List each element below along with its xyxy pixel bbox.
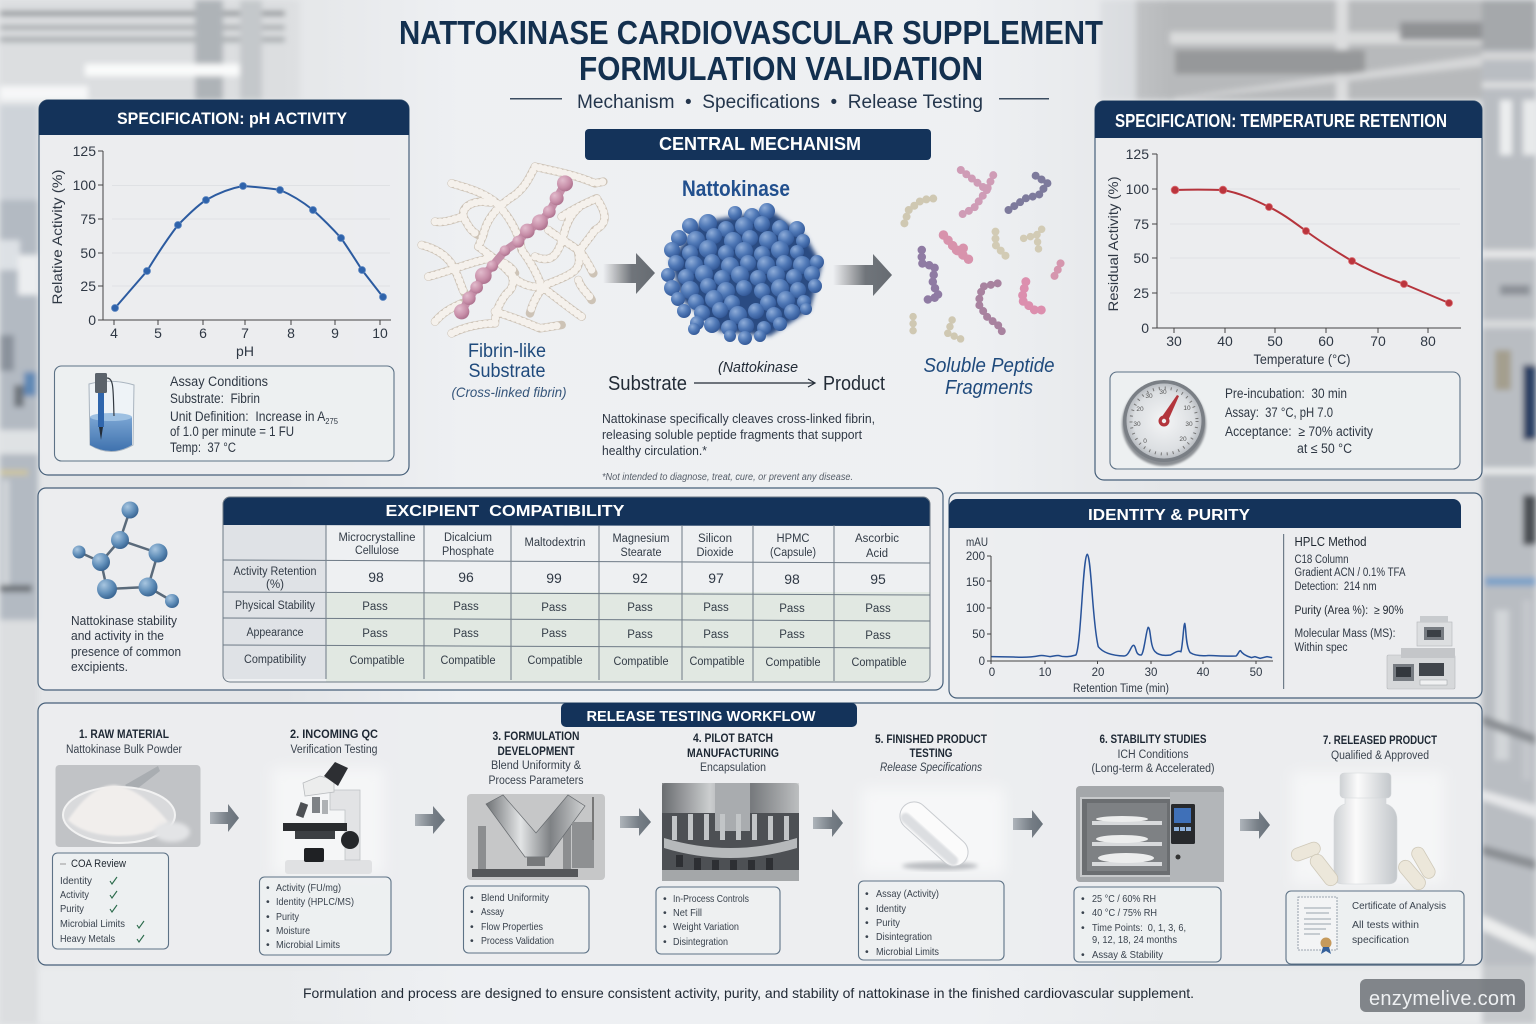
table: excipient compatibility: 92 xyxy=(632,570,648,586)
heading: central mechanism: CENTRAL MECHANISM xyxy=(659,134,861,154)
table: excipient compatibility: Magnesium xyxy=(612,533,670,545)
panel: temperature retention xyxy=(1095,101,1482,480)
text: assay conditions: Temp: 37 °C xyxy=(170,440,236,455)
box: COA review: Microbial Limits xyxy=(60,918,125,930)
box: ICH conditions xyxy=(1074,887,1221,962)
table: excipient compatibility: Pass xyxy=(627,602,653,614)
step 5: finished product testing: 5. FINISHED PRODUCT xyxy=(875,732,988,746)
table: excipient compatibility: 95 xyxy=(870,571,886,587)
table: excipient compatibility: Silicon xyxy=(698,533,732,545)
label: fibrin-like substrate: (Cross-linked fibrin) xyxy=(452,384,566,400)
arrow 2 xyxy=(415,806,445,834)
text: HPLC method: Within spec xyxy=(1294,642,1348,654)
title: NATTOKINASE CARDIOVASCULAR SUPPLEMENT xyxy=(399,14,1103,51)
table: excipient compatibility: Phosphate xyxy=(442,546,494,558)
text: HPLC method: HPLC Method xyxy=(1294,534,1366,549)
table: excipient compatibility: Pass xyxy=(362,628,388,640)
chromatogram: 10 xyxy=(1039,667,1051,679)
text: pre-incubation conditions: Pre-incubation: 30 min xyxy=(1225,386,1347,401)
table: excipient compatibility: Compatible xyxy=(350,655,404,667)
table: excipient compatibility: Pass xyxy=(541,602,567,614)
box: in-process tests: • xyxy=(663,936,667,948)
text: assay conditions: Substrate: Fibrin xyxy=(170,391,260,406)
box: incoming QC tests: Moisture xyxy=(276,925,310,937)
icon: temperature gauge: 30 xyxy=(1133,421,1141,428)
image: V blender xyxy=(467,794,605,880)
box: assay conditions xyxy=(54,366,394,461)
table: excipient compatibility: 98 xyxy=(784,571,800,587)
box: incoming QC tests: Activity (FU/mg) xyxy=(276,882,341,894)
table: excipient compatibility: Pass xyxy=(627,629,653,641)
image: bottle with capsules xyxy=(1290,772,1444,893)
label: soluble peptide fragments: Soluble Peptide xyxy=(924,355,1054,377)
box: incoming QC tests: Microbial Limits xyxy=(276,939,340,951)
line chart: pH activity: 7 xyxy=(241,325,249,341)
table: excipient compatibility: Physical Stability xyxy=(235,600,315,612)
reaction equation: Product xyxy=(823,373,885,395)
icon: temperature gauge: 30 xyxy=(1145,393,1153,400)
step 3: formulation development: Process Parameters xyxy=(488,775,584,787)
chromatogram: 150 xyxy=(966,577,985,589)
box: COA review xyxy=(52,853,168,949)
chromatogram: 0 xyxy=(979,656,985,668)
table: excipient compatibility: 99 xyxy=(546,570,562,586)
box: release tests xyxy=(858,881,1004,960)
label: fibrin-like substrate: Substrate xyxy=(468,361,546,382)
text: pre-incubation conditions: Acceptance: ≥ 70% activity xyxy=(1225,424,1373,439)
panel heading: identity and purity: IDENTITY & PURITY xyxy=(1088,507,1250,524)
text: assay conditions: 275 xyxy=(325,416,338,426)
table: excipient compatibility: HPMC xyxy=(776,533,810,545)
text: mechanism description: releasing soluble peptide fragments that support xyxy=(602,427,862,442)
table: excipient compatibility: Compatible xyxy=(440,655,496,667)
box: in-process tests: • xyxy=(663,921,667,933)
step 2: incoming QC: Verification Testing xyxy=(290,744,378,756)
text: assay conditions xyxy=(170,374,338,455)
text: excipient note: Nattokinase stability xyxy=(71,614,178,628)
icon: temperature gauge xyxy=(1122,380,1206,466)
line chart: pH activity: 25 xyxy=(80,278,96,294)
box: in-process tests xyxy=(656,887,780,954)
step 5: finished product testing: Release Specifications xyxy=(880,762,982,774)
icon: temperature gauge: 30 xyxy=(1185,421,1193,428)
image: capsule xyxy=(862,788,1004,874)
box: release tests: • xyxy=(865,888,869,900)
text: HPLC method: Gradient ACN / 0.1% TFA xyxy=(1294,567,1406,579)
panel heading: release testing workflow: RELEASE TESTING WORKFLOW xyxy=(586,708,816,725)
box: incoming QC tests: • xyxy=(266,882,270,894)
panel: release testing workflow xyxy=(38,703,1482,965)
step 1: raw material: Nattokinase Bulk Powder xyxy=(66,744,182,756)
chromatogram xyxy=(966,537,1273,695)
table: excipient compatibility: Cellulose xyxy=(355,545,399,557)
chromatogram: 40 xyxy=(1197,667,1209,679)
text: mechanism description: healthy circulation.* xyxy=(602,443,707,458)
arrow 6 xyxy=(1240,811,1270,839)
box: incoming QC tests: • xyxy=(266,925,270,937)
box: in-process tests: In-Process Controls xyxy=(673,893,749,905)
chromatogram: mAU xyxy=(966,537,988,549)
table: excipient compatibility: Pass xyxy=(703,602,729,614)
table: excipient compatibility: Microcrystalline xyxy=(338,532,416,544)
panel heading: temperature retention: SPECIFICATION: TEMPERATURE RETENTION xyxy=(1115,111,1447,131)
box: formulation tests: Blend Uniformity xyxy=(481,892,550,904)
table: excipient compatibility: Compatible xyxy=(690,656,744,668)
icon: temperature gauge: 0 xyxy=(1143,438,1147,445)
box: ICH conditions: Time Points: 0, 1, 3, 6, xyxy=(1092,922,1186,934)
table: excipient compatibility: Compatible xyxy=(528,655,582,667)
table: excipient compatibility xyxy=(223,497,930,682)
footer statement: Formulation and process are designed to ensure consistent activity, purity, and stability of nattokinase in the finished cardiovascular supplement. xyxy=(303,985,1194,1001)
chromatogram: Retention Time (min) xyxy=(1073,683,1169,695)
line chart: temperature retention: 40 xyxy=(1217,333,1233,349)
box: incoming QC tests: • xyxy=(266,896,270,908)
text: excipient note xyxy=(71,614,181,674)
chromatogram: 50 xyxy=(1250,667,1262,679)
chromatogram: 100 xyxy=(966,603,985,615)
label: soluble peptide fragments xyxy=(924,355,1054,399)
step 3: formulation development: Blend Uniformity & xyxy=(491,760,581,772)
line chart: temperature retention: 30 xyxy=(1166,333,1182,349)
table: excipient compatibility: Activity Retention xyxy=(234,566,316,578)
table: excipient compatibility: Compatible xyxy=(766,657,820,669)
table: excipient compatibility: Dicalcium xyxy=(444,532,492,544)
panel heading: pH activity: SPECIFICATION: pH ACTIVITY xyxy=(117,109,348,128)
line chart: pH activity: 50 xyxy=(80,245,96,261)
step 1: raw material xyxy=(52,727,200,949)
line chart: temperature retention: 75 xyxy=(1133,216,1149,232)
line chart: pH activity: Relative Activity (%) xyxy=(49,170,65,304)
box: COA review: Purity xyxy=(60,903,85,915)
text: assay conditions: Unit Definition: Increase in A xyxy=(170,409,343,424)
text: pre-incubation conditions: at ≤ 50 °C xyxy=(1297,441,1352,456)
text: HPLC method: Detection: 214 nm xyxy=(1294,581,1376,593)
step 4: pilot batch manufacturing: MANUFACTURING xyxy=(687,746,779,760)
box: incoming QC tests: Purity xyxy=(276,911,300,923)
line chart: pH activity: 75 xyxy=(80,211,96,227)
arrow: substrate to enzyme xyxy=(603,253,655,294)
panel heading: identity and purity xyxy=(949,499,1461,528)
line chart: temperature retention: Residual Activity (%) xyxy=(1105,176,1121,312)
title xyxy=(399,14,1103,87)
box: release tests: • xyxy=(865,917,869,929)
table: excipient compatibility: Acid xyxy=(866,548,888,560)
step 3: formulation development: 3. FORMULATION xyxy=(492,729,580,743)
box: certificate of analysis: specification xyxy=(1352,934,1409,946)
arrow 3 xyxy=(620,808,651,836)
line chart: temperature retention: 50 xyxy=(1267,333,1283,349)
text: mechanism description: Nattokinase specifically cleaves cross-linked fibrin, xyxy=(602,411,875,426)
line chart: pH activity: 8 xyxy=(287,325,295,341)
line chart: pH activity: 125 xyxy=(73,143,96,159)
line chart: temperature retention: 125 xyxy=(1126,146,1149,162)
box: ICH conditions: 40 °C / 75% RH xyxy=(1092,907,1157,919)
box: release tests: Identity xyxy=(876,903,907,915)
table: excipient compatibility: Pass xyxy=(453,628,479,640)
chromatogram: 50 xyxy=(972,629,985,641)
reaction equation: Substrate xyxy=(608,373,687,395)
illustration: fibrin-like substrate network xyxy=(422,167,605,333)
icon: beaker with pH probe xyxy=(89,373,134,452)
line chart: temperature retention: 80 xyxy=(1420,333,1436,349)
label: fibrin-like substrate xyxy=(452,341,566,400)
step 6: stability studies: ICH Conditions xyxy=(1118,749,1189,761)
line chart: temperature retention: 70 xyxy=(1370,333,1386,349)
box: COA review: Heavy Metals xyxy=(60,933,115,945)
line chart: pH activity: 0 xyxy=(88,312,96,328)
box: in-process tests: • xyxy=(663,893,667,905)
step 2: incoming QC: 2. INCOMING QC xyxy=(290,727,378,741)
box: in-process tests: Net Fill xyxy=(673,907,702,919)
step 6: stability studies xyxy=(1074,732,1224,962)
line chart: temperature retention: 100 xyxy=(1126,181,1149,197)
heading: central mechanism xyxy=(585,129,931,160)
table: excipient compatibility: Stearate xyxy=(620,547,662,559)
text: HPLC method xyxy=(1294,534,1406,654)
table: excipient compatibility: Compatible xyxy=(852,657,906,669)
box: incoming QC tests xyxy=(260,877,391,955)
icon: temperature gauge: 20 xyxy=(1136,406,1144,413)
box: formulation tests: • xyxy=(470,921,474,933)
step 2: incoming QC xyxy=(260,727,391,955)
label: nattokinase: Nattokinase xyxy=(682,176,790,201)
panel heading: temperature retention xyxy=(1095,101,1482,138)
arrow 5 xyxy=(1013,810,1043,838)
box: COA review: COA Review xyxy=(71,858,126,870)
step 1: raw material: 1. RAW MATERIAL xyxy=(79,727,169,741)
line chart: temperature retention: 0 xyxy=(1141,320,1149,336)
text: excipient note: presence of common xyxy=(71,645,181,659)
icon: HPLC instrument xyxy=(1387,616,1455,689)
table: excipient compatibility: Pass xyxy=(453,601,479,613)
panel: excipient compatibility xyxy=(38,488,943,690)
table: excipient compatibility: Appearance xyxy=(246,627,304,639)
box: formulation tests: Flow Properties xyxy=(481,921,543,933)
line chart: temperature retention: 50 xyxy=(1133,250,1149,266)
illustration: soluble peptide fragments xyxy=(904,170,1061,340)
table: excipient compatibility: Pass xyxy=(779,629,805,641)
box: formulation tests xyxy=(464,886,589,953)
step 7: released product xyxy=(1286,733,1464,964)
text: HPLC method: C18 Column xyxy=(1294,554,1348,566)
label: fibrin-like substrate: Fibrin-like xyxy=(468,341,546,362)
box: formulation tests: Process Validation xyxy=(481,935,554,947)
chromatogram: 20 xyxy=(1092,667,1104,679)
watermark: enzymelive.com xyxy=(1369,988,1516,1010)
line chart: pH activity: 100 xyxy=(73,177,96,193)
text: assay conditions: of 1.0 per minute = 1 FU xyxy=(170,424,294,439)
panel heading: release testing workflow xyxy=(561,703,857,727)
text: mechanism description xyxy=(602,411,875,458)
box: in-process tests: Weight Variation xyxy=(673,921,739,933)
text: pre-incubation conditions: Assay: 37 °C, pH 7.0 xyxy=(1225,405,1333,420)
step 6: stability studies: 6. STABILITY STUDIES xyxy=(1100,732,1206,746)
table: excipient compatibility: Pass xyxy=(541,628,567,640)
table heading xyxy=(223,497,930,526)
step 7: released product: Qualified & Approved xyxy=(1331,750,1429,762)
subtitle: Mechanism • Specifications • Release Testing xyxy=(577,91,983,113)
table: excipient compatibility: Compatible xyxy=(614,656,668,668)
table: excipient compatibility: Maltodextrin xyxy=(524,537,586,549)
reaction equation xyxy=(608,359,885,395)
box: release tests: • xyxy=(865,931,869,943)
footnote: *Not intended to diagnose, treat, cure, or prevent any disease. xyxy=(602,471,853,483)
arrow: enzyme to products xyxy=(833,254,892,296)
arrow 1 xyxy=(210,804,239,832)
step 4: pilot batch manufacturing: 4. PILOT BATCH xyxy=(693,731,773,745)
line chart: temperature retention: 25 xyxy=(1133,285,1149,301)
text: HPLC method: Molecular Mass (MS): xyxy=(1294,628,1396,640)
line chart: pH activity: 10 xyxy=(372,325,388,341)
title: FORMULATION VALIDATION xyxy=(579,50,983,87)
box: release tests: Purity xyxy=(876,917,901,929)
table: excipient compatibility: 96 xyxy=(458,569,474,585)
box: ICH conditions: Assay & Stability xyxy=(1092,949,1164,961)
box: incoming QC tests: Identity (HPLC/MS) xyxy=(276,896,354,908)
table: excipient compatibility: (%) xyxy=(266,579,284,591)
box: ICH conditions: 9, 12, 18, 24 months xyxy=(1092,934,1177,946)
icon: molecule xyxy=(72,502,179,608)
box: incoming QC tests: • xyxy=(266,939,270,951)
text: HPLC method: Purity (Area %): ≥ 90% xyxy=(1294,605,1404,617)
box: in-process tests: • xyxy=(663,907,667,919)
step 5: finished product testing: TESTING xyxy=(910,746,952,760)
icon: temperature gauge: 30 xyxy=(1159,389,1167,396)
line chart: pH activity: 6 xyxy=(199,325,207,341)
box: ICH conditions: • xyxy=(1081,922,1085,934)
icon: temperature gauge: 20 xyxy=(1179,436,1187,443)
line chart: pH activity xyxy=(49,143,391,359)
box: incoming QC tests: • xyxy=(266,911,270,923)
text: pre-incubation conditions xyxy=(1225,386,1373,456)
box: formulation tests: • xyxy=(470,906,474,918)
image: powder in dish xyxy=(56,765,200,847)
box: certificate of analysis xyxy=(1286,891,1464,964)
box: COA review: Activity xyxy=(60,889,90,901)
icon: temperature gauge: 10 xyxy=(1183,405,1191,412)
box: formulation tests: • xyxy=(470,892,474,904)
panel heading: pH activity xyxy=(39,100,409,135)
box: in-process tests: Disintegration xyxy=(673,936,728,948)
box: pre-incubation conditions xyxy=(1110,372,1460,469)
text: excipient note: excipients. xyxy=(71,660,128,674)
table: excipient compatibility: Ascorbic xyxy=(855,533,899,545)
line chart: pH activity: 4 xyxy=(110,325,118,341)
line chart: temperature retention: 60 xyxy=(1318,333,1334,349)
box: release tests: Disintegration xyxy=(876,931,932,943)
line chart: pH activity: 9 xyxy=(331,325,339,341)
step 4: pilot batch manufacturing xyxy=(656,731,799,954)
box: release tests: • xyxy=(865,946,869,958)
text: assay conditions: Assay Conditions xyxy=(170,374,268,389)
box: formulation tests: Assay xyxy=(481,906,505,918)
line chart: pH activity: 5 xyxy=(154,325,162,341)
image: encapsulation machine xyxy=(662,783,799,881)
box: COA review: Identity xyxy=(60,875,93,887)
step 3: formulation development: DEVELOPMENT xyxy=(498,744,575,758)
table: excipient compatibility: 98 xyxy=(368,569,384,585)
table: excipient compatibility: Dioxide xyxy=(696,547,734,559)
box: certificate of analysis: All tests within xyxy=(1352,919,1419,931)
table: excipient compatibility: Pass xyxy=(865,630,891,642)
table: excipient compatibility: Pass xyxy=(362,601,388,613)
box: ICH conditions: • xyxy=(1081,893,1085,905)
reaction equation: (Nattokinase xyxy=(718,359,798,376)
table heading: EXCIPIENT COMPATIBILITY xyxy=(386,503,625,520)
line chart: temperature retention: Temperature (°C) xyxy=(1254,351,1350,367)
label: soluble peptide fragments: Fragments xyxy=(945,377,1033,399)
illustration: nattokinase enzyme xyxy=(661,203,824,345)
box: release tests: • xyxy=(865,903,869,915)
chromatogram: 0 xyxy=(989,667,995,679)
table: excipient compatibility: Pass xyxy=(703,629,729,641)
text: excipient note: and activity in the xyxy=(71,629,164,643)
box: certificate of analysis: Certificate of Analysis xyxy=(1352,900,1446,912)
box: formulation tests: • xyxy=(470,935,474,947)
table: excipient compatibility: Pass xyxy=(779,603,805,615)
step 4: pilot batch manufacturing: Encapsulation xyxy=(700,762,766,774)
step 6: stability studies: (Long-term & Accelerated) xyxy=(1092,763,1215,775)
image: microscope xyxy=(272,762,384,874)
box: ICH conditions: • xyxy=(1081,949,1085,961)
table: excipient compatibility: (Capsule) xyxy=(770,547,816,559)
box: ICH conditions: 25 °C / 60% RH xyxy=(1092,893,1156,905)
box: release tests: Microbial Limits xyxy=(876,946,939,958)
chromatogram: 30 xyxy=(1145,667,1157,679)
line chart: temperature retention xyxy=(1105,146,1461,367)
table: excipient compatibility: 97 xyxy=(708,570,724,586)
panel: pH activity xyxy=(39,100,409,475)
panel: identity and purity xyxy=(949,493,1482,698)
table: excipient compatibility: Pass xyxy=(865,603,891,615)
step 5: finished product testing xyxy=(858,732,1004,960)
box: ICH conditions: • xyxy=(1081,907,1085,919)
step 7: released product: 7. RELEASED PRODUCT xyxy=(1323,733,1438,747)
line chart: pH activity: pH xyxy=(236,343,254,359)
table: excipient compatibility: Compatibility xyxy=(244,654,306,666)
icon: certificate xyxy=(1298,897,1337,954)
step 3: formulation development xyxy=(464,729,605,953)
image: stability chamber xyxy=(1076,786,1224,882)
arrow 4 xyxy=(813,809,843,837)
box: release tests: Assay (Activity) xyxy=(876,888,939,900)
watermark xyxy=(1360,979,1525,1012)
chromatogram: 200 xyxy=(966,551,985,563)
